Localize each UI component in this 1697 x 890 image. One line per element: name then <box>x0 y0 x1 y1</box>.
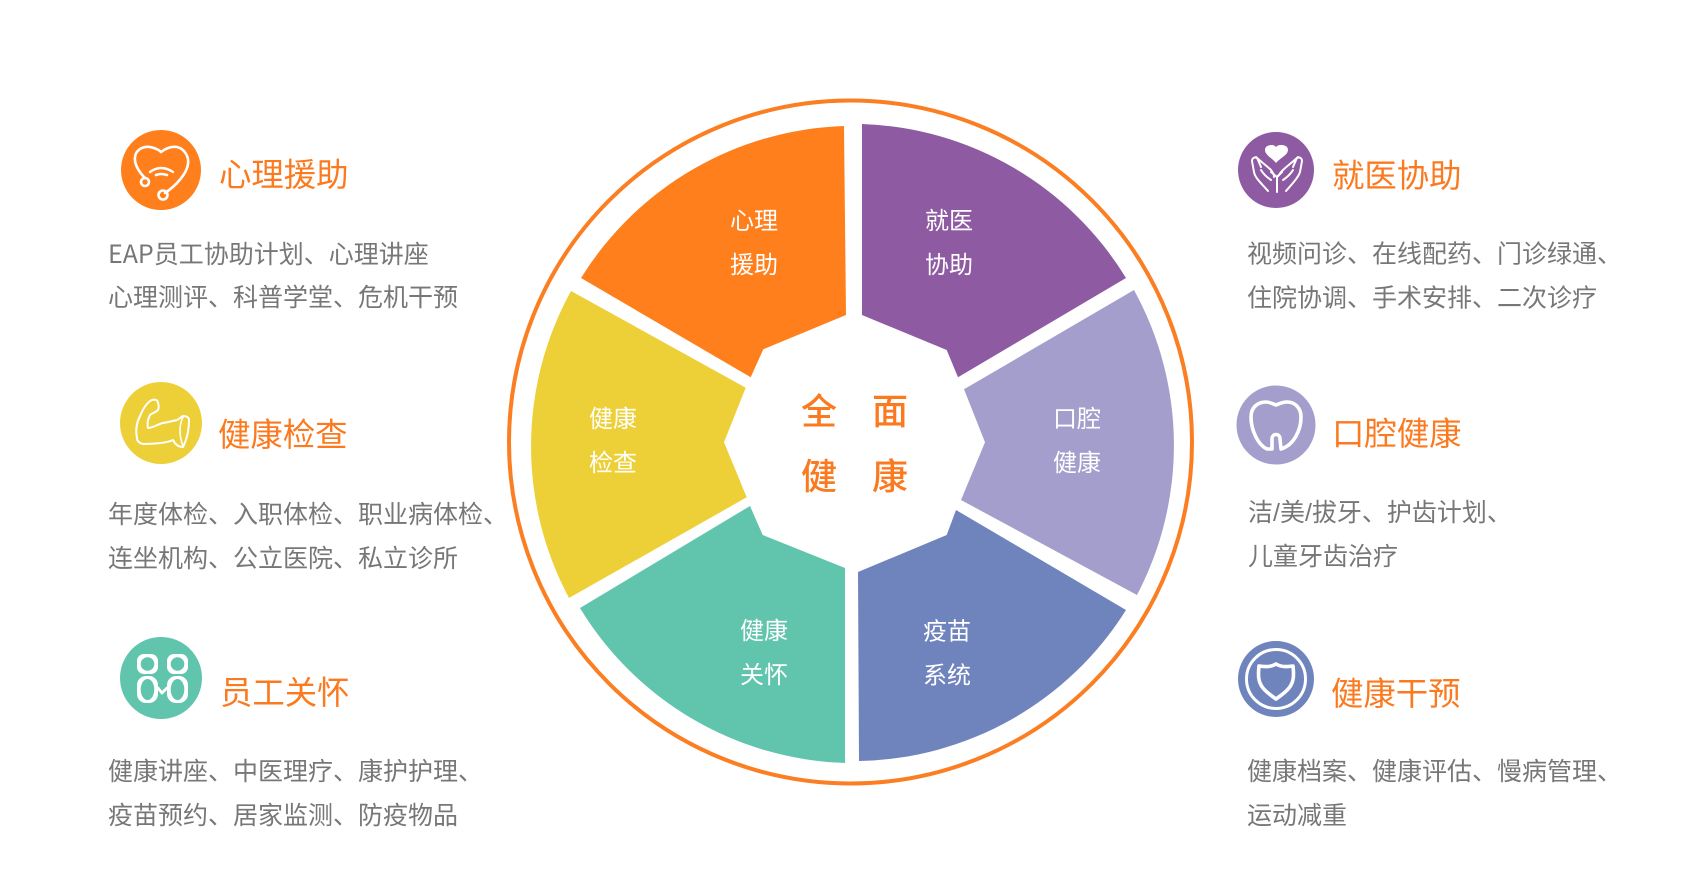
heading: 员工关怀 <box>220 675 350 711</box>
icon: two people glasses <box>120 637 202 719</box>
wheel label: employee care: 关怀 <box>740 662 788 689</box>
center title: 健 <box>801 456 837 497</box>
wheel label: psychological aid <box>730 208 778 279</box>
segment: health checkup <box>531 291 747 598</box>
icon: hands holding heart <box>1238 132 1314 208</box>
text block <box>1247 240 1622 312</box>
text block: 儿童牙齿治疗 <box>1248 543 1398 571</box>
segment: medical assistance <box>862 124 1126 377</box>
segment: psychological aid <box>581 126 846 377</box>
text block: EAP员工协助计划、心理讲座 <box>108 235 429 271</box>
icon: tooth <box>1236 386 1316 464</box>
wheel label: employee care: 健康 <box>740 618 788 645</box>
panel: medical assistance <box>1238 132 1622 312</box>
wheel label: vaccine system <box>923 618 971 690</box>
icon: flexed arm <box>120 382 202 464</box>
icon: shield <box>1238 641 1314 717</box>
heading: 健康检查 <box>218 417 348 453</box>
wheel label: vaccine system: 疫苗 <box>923 618 971 646</box>
wheel label: psychological aid: 援助 <box>730 252 778 279</box>
icon: heart stethoscope <box>121 130 201 210</box>
text block <box>108 501 508 573</box>
heading: 健康干预 <box>1331 676 1461 712</box>
panel: health checkup <box>108 382 508 573</box>
wheel label: oral health: 口腔 <box>1053 406 1101 433</box>
heading: 就医协助 <box>1332 158 1462 194</box>
text block <box>108 758 483 830</box>
segment: vaccine system <box>858 510 1126 761</box>
wheel label: vaccine system: 系统 <box>923 662 971 690</box>
text block: 疫苗预约、居家监测、防疫物品 <box>108 802 458 830</box>
wheel label: psychological aid: 心理 <box>730 208 778 235</box>
center title: 面 <box>872 391 908 432</box>
text block: 健康讲座、中医理疗、康护护理、 <box>108 758 483 786</box>
panel: oral health <box>1236 386 1512 571</box>
text block: 健康档案、健康评估、慢病管理、 <box>1247 758 1622 786</box>
wheel label: medical assistance: 协助 <box>925 252 973 279</box>
center title: 全 <box>801 391 837 432</box>
panel: health intervention <box>1238 641 1622 830</box>
text block: 心理测评、科普学堂、危机干预 <box>108 284 458 312</box>
outer orange ring <box>509 100 1192 784</box>
center title: 康 <box>872 456 908 497</box>
text block <box>1247 758 1622 830</box>
wheel label: medical assistance <box>925 208 973 279</box>
text block: 年度体检、入职体检、职业病体检、 <box>108 501 508 529</box>
text block: 住院协调、手术安排、二次诊疗 <box>1247 284 1597 312</box>
wheel label: health checkup: 健康 <box>589 406 637 433</box>
heading: 心理援助 <box>219 157 349 193</box>
wheel label: employee care <box>740 618 788 689</box>
text block <box>1248 499 1512 571</box>
wheel label: health checkup: 检查 <box>589 450 637 477</box>
text block: 连坐机构、公立医院、私立诊所 <box>108 545 458 573</box>
text block: 视频问诊、在线配药、门诊绿通、 <box>1247 240 1622 268</box>
wheel label: medical assistance: 就医 <box>925 208 973 235</box>
heading: 口腔健康 <box>1332 416 1462 452</box>
segment: employee care <box>580 506 845 763</box>
wheel label: oral health: 健康 <box>1053 450 1101 477</box>
wheel: comprehensive health <box>509 100 1192 784</box>
segment: oral health <box>961 290 1174 595</box>
text block <box>108 235 458 312</box>
text block: 运动减重 <box>1247 802 1347 830</box>
wheel label: oral health <box>1053 406 1101 477</box>
panel: employee care <box>108 637 483 830</box>
text block: 洁/美/拔牙、护齿计划、 <box>1248 499 1512 527</box>
panel: psychological aid <box>108 130 458 312</box>
wheel label: health checkup <box>589 406 637 477</box>
center title <box>801 391 908 497</box>
